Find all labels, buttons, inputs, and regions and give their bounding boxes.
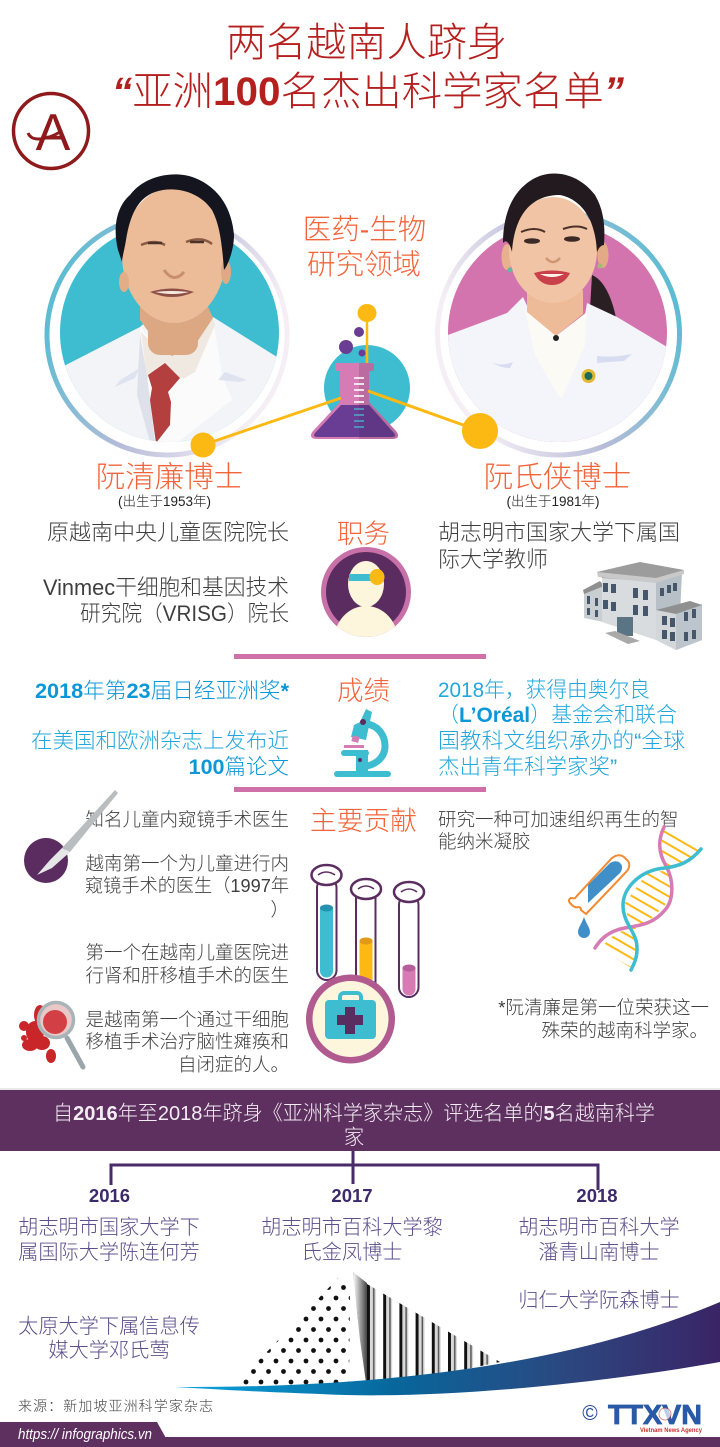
text: left scientist contributions: 是越南第一个通过干细胞 xyxy=(85,1009,289,1030)
year: 2016: 太原大学下属信息传 xyxy=(18,1315,200,1338)
text: left scientist contributions: 知名儿童内窥镜手术医生 xyxy=(85,809,289,830)
text: left scientist positions: Vinmec干细胞和基因技术 xyxy=(43,575,289,600)
logo: TTXVN: Vietnam News Agency xyxy=(640,1427,702,1434)
year: 2018 xyxy=(518,1185,680,1312)
text: footnote: *阮清廉是第一位荣获这一 xyxy=(498,997,709,1018)
text: left scientist contributions xyxy=(85,809,289,1075)
logo: TTXVN: TTXVN xyxy=(608,1399,702,1430)
year: 2018: 2018 xyxy=(576,1185,618,1206)
icon: A logo: A xyxy=(36,104,71,162)
text: right scientist achievements xyxy=(438,678,685,779)
footer bar with url: https:// infographics.vn xyxy=(18,1426,152,1443)
text: right scientist achievements: 2018年，获得由奥尔良 xyxy=(438,678,650,702)
text: left scientist achievements: 在美国和欧洲杂志上发布近 xyxy=(31,729,289,753)
text: right scientist contribution: 能纳米凝胶 xyxy=(438,831,531,852)
text: source: 来源：新加坡亚洲科学家杂志 xyxy=(18,1398,213,1414)
year: 2018: 潘青山南博士 xyxy=(538,1241,660,1264)
text: footnote xyxy=(498,997,709,1041)
text: left scientist contributions: ） xyxy=(270,899,289,920)
icon: test tubes and first aid badge xyxy=(306,865,424,1064)
text: left scientist contributions: 越南第一个为儿童进行内 xyxy=(85,853,289,874)
text: left scientist contributions: 窥镜手术的医生（1997年 xyxy=(85,875,289,896)
name: right scientist xyxy=(484,461,631,509)
heading: achievements: 成绩 xyxy=(337,676,390,706)
year: 2016: 胡志明市国家大学下 xyxy=(18,1216,200,1239)
panel: timeline header band: 家 xyxy=(344,1126,364,1149)
year: 2016: 2016 xyxy=(89,1185,130,1206)
footer bar with url xyxy=(0,1422,720,1447)
panel: portrait of Dr Nguyen Thanh Liem xyxy=(47,174,287,460)
year: 2017: 胡志明市百科大学黎 xyxy=(261,1216,443,1239)
year: 2017 xyxy=(261,1185,443,1264)
chart: mountain and swoosh graphic xyxy=(175,1272,720,1395)
text: left scientist achievements: 2018年第23届日经亚洲奖* xyxy=(35,679,290,703)
title: 两名越南人跻身 xyxy=(226,21,507,65)
text: left scientist contributions: 移植手术治疗脑性瘫痪和 xyxy=(85,1031,289,1052)
icon: magnifier with blood cells xyxy=(19,1002,83,1067)
year: 2017: 2017 xyxy=(331,1185,373,1206)
logo: TTXVN xyxy=(582,1399,702,1434)
text: right scientist position xyxy=(438,520,680,572)
text: left scientist positions: 研究院（VRISG）院长 xyxy=(80,601,289,626)
icon: flask with connecting lines xyxy=(190,304,498,458)
name: left scientist: (出生于1953年) xyxy=(118,494,211,509)
name: right scientist: (出生于1981年) xyxy=(506,494,600,509)
year: 2018: 归仁大学阮森博士 xyxy=(518,1289,680,1312)
icon: university building xyxy=(583,562,702,650)
year: 2018: 胡志明市百科大学 xyxy=(518,1216,680,1239)
name: left scientist: 阮清廉博士 xyxy=(96,461,243,494)
icon: A logo xyxy=(14,94,88,168)
icon: pipette and DNA xyxy=(569,827,701,970)
text: left scientist contributions: 自闭症的人。 xyxy=(178,1054,289,1075)
heading: positions: 职务 xyxy=(337,519,390,549)
icon: microscope xyxy=(334,709,391,777)
year: 2016: 属国际大学陈连何芳 xyxy=(18,1241,200,1264)
text: right scientist contribution: 研究一种可加速组织再生的智 xyxy=(438,809,679,830)
year: 2016: 媒大学邓氏莺 xyxy=(48,1339,170,1362)
divider: achievements and contributions xyxy=(234,787,486,792)
logo: TTXVN: © xyxy=(582,1402,598,1425)
year: 2017: 氏金凤博士 xyxy=(302,1241,402,1264)
icon: scalpel xyxy=(24,790,118,883)
timeline connector xyxy=(111,1151,598,1190)
text: right scientist position: 际大学教师 xyxy=(438,547,548,572)
heading: research field: 研究领域 xyxy=(307,249,421,281)
text: left scientist contributions: 第一个在越南儿童医院进 xyxy=(85,942,289,963)
heading: research field xyxy=(303,214,426,281)
text: right scientist achievements: 杰出青年科学家奖” xyxy=(438,755,617,779)
text: footnote: 殊荣的越南科学家。 xyxy=(541,1020,708,1041)
text: right scientist achievements: （L’Oréal）基金会和联合 xyxy=(438,703,677,727)
text: right scientist position: 胡志明市国家大学下属国 xyxy=(438,520,680,545)
text: right scientist achievements: 国教科文组织承办的“全球 xyxy=(438,729,685,753)
text: left scientist achievements: 100篇论文 xyxy=(189,755,289,779)
heading: main contributions: 主要贡献 xyxy=(310,806,417,836)
text: left scientist contributions: 行肾和肝移植手术的医生 xyxy=(85,965,289,986)
title: “亚洲100名杰出科学家名单” xyxy=(112,70,624,114)
year: 2016 xyxy=(18,1185,200,1362)
text: left scientist achievements xyxy=(31,679,290,779)
text: left scientist positions xyxy=(43,520,289,626)
panel: timeline header band: 自2016年至2018年跻身《亚洲科学家杂志》评选名单的5名越南科学 xyxy=(53,1102,655,1125)
icon: doctor badge xyxy=(321,547,411,637)
text: right scientist contribution xyxy=(438,809,679,852)
name: right scientist: 阮氏侠博士 xyxy=(484,461,631,494)
divider: positions and achievements xyxy=(234,654,486,659)
panel: portrait of Dr Nguyen Thi Hiep xyxy=(438,173,680,460)
panel: timeline header band xyxy=(0,1088,720,1151)
title xyxy=(112,21,624,114)
heading: research field: 医药-生物 xyxy=(303,214,426,246)
name: left scientist xyxy=(96,461,243,509)
text: left scientist positions: 原越南中央儿童医院院长 xyxy=(47,520,289,545)
